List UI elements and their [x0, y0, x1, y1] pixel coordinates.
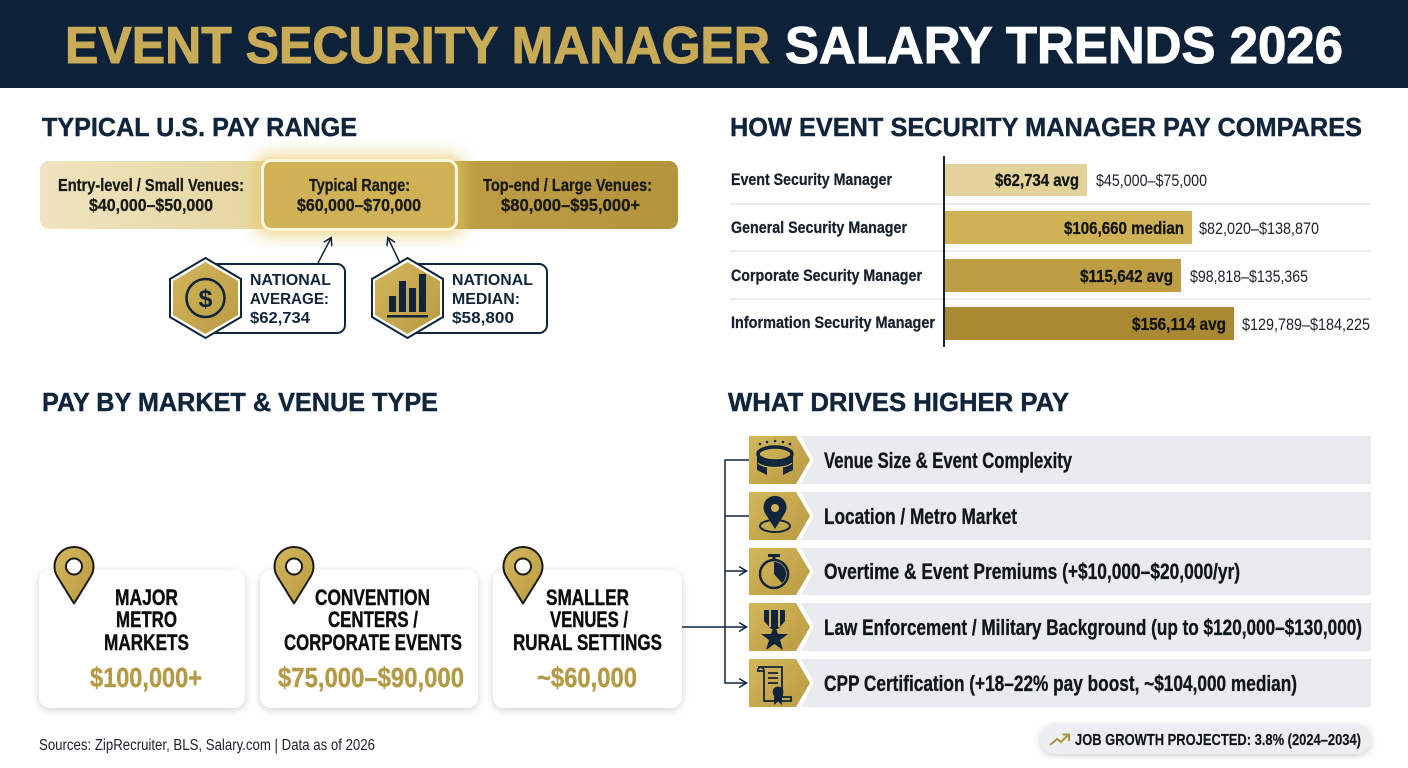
icon: certificate	[758, 667, 791, 703]
panel: pay range bar: Typical Range:	[309, 175, 410, 195]
heading: typical pay range: TYPICAL U.S. PAY RANGE	[42, 112, 357, 142]
row: general security manager	[731, 211, 1319, 244]
callout: national median	[372, 258, 547, 338]
panel: pay range bar: Entry-level / Small Venues:	[58, 175, 244, 195]
card: convention centers	[260, 547, 478, 708]
callout: national average: $62,734	[250, 310, 310, 327]
row: corporate security manager	[731, 259, 1308, 292]
callout: national average: AVERAGE:	[250, 291, 329, 308]
row: information security manager: $156,114 avg	[1132, 314, 1226, 334]
card: smaller venues: RURAL SETTINGS	[513, 630, 662, 655]
card: major metro markets	[39, 547, 245, 708]
card: major metro markets: MAJOR	[115, 585, 178, 610]
callout: national median: MEDIAN:	[452, 291, 520, 308]
arrow: average to typical range	[318, 238, 331, 263]
panel: pay range bar: Top-end / Large Venues:	[483, 175, 652, 195]
row: general security manager: $82,020–$138,870	[1199, 220, 1319, 238]
heading: market and venue: PAY BY MARKET & VENUE TYPE	[42, 387, 438, 417]
row: corporate security manager: $98,818–$135,365	[1190, 268, 1308, 286]
card: smaller venues: SMALLER	[546, 585, 629, 610]
icon: map pin	[760, 496, 790, 532]
row: information security manager: Information Security Manager	[731, 313, 935, 332]
driver: location	[749, 492, 1371, 540]
driver: overtime	[749, 548, 1371, 595]
row: information security manager: $129,789–$184,225	[1242, 316, 1370, 334]
callout: national average	[170, 258, 345, 338]
card: major metro markets: $100,000+	[90, 662, 202, 693]
panel: pay range bar: $80,000–$95,000+	[501, 195, 640, 215]
card: smaller venues: VENUES /	[550, 607, 628, 632]
arrow: median to typical range	[388, 238, 400, 263]
panel: pay range bar: $60,000–$70,000	[297, 195, 421, 215]
row: general security manager: General Security Manager	[731, 218, 907, 237]
row: information security manager	[731, 307, 1370, 340]
card: convention centers: CORPORATE EVENTS	[284, 630, 462, 655]
card: smaller venues	[493, 547, 682, 708]
driver: location: Location / Metro Market	[824, 504, 1017, 529]
title banner	[0, 0, 1408, 88]
source note: Sources: ZipRecruiter, BLS, Salary.com | Data as of 2026	[39, 737, 375, 754]
connector arrows	[682, 460, 749, 683]
heading: what drives higher pay: WHAT DRIVES HIGHER PAY	[728, 387, 1069, 417]
title banner: EVENT SECURITY MANAGER	[65, 17, 770, 75]
card: major metro markets: MARKETS	[104, 630, 189, 655]
callout: national average: NATIONAL	[250, 272, 331, 289]
card: smaller venues: ~$60,000	[537, 662, 637, 693]
icon: growth arrow	[1050, 734, 1069, 745]
icon: stopwatch	[760, 554, 788, 588]
card: convention centers: CONVENTION	[315, 585, 430, 610]
row: corporate security manager: $115,642 avg	[1080, 266, 1173, 286]
row: event security manager: $62,734 avg	[995, 170, 1079, 190]
callout: national median: $58,800	[452, 310, 514, 327]
heading: pay comparison: HOW EVENT SECURITY MANAGER PAY COMPARES	[730, 112, 1362, 142]
driver: venue size: Venue Size & Event Complexity	[824, 448, 1072, 473]
icon: medal	[761, 610, 788, 650]
driver: military background	[749, 603, 1371, 651]
card: major metro markets: METRO	[116, 607, 177, 632]
row: corporate security manager: Corporate Security Manager	[731, 266, 922, 285]
row: event security manager: $45,000–$75,000	[1096, 172, 1207, 190]
row: general security manager: $106,660 median	[1064, 218, 1184, 238]
job growth pill	[1040, 724, 1371, 754]
icon: stadium	[757, 440, 793, 475]
row: event security manager: Event Security Manager	[731, 170, 892, 189]
card: convention centers: CENTERS /	[328, 607, 418, 632]
callout: national median: NATIONAL	[452, 272, 533, 289]
job growth pill: JOB GROWTH PROJECTED: 3.8% (2024–2034)	[1075, 732, 1361, 749]
title banner: SALARY TRENDS 2026	[785, 17, 1343, 75]
driver: cpp certification	[749, 659, 1371, 707]
bar chart: pay comparison	[730, 156, 1370, 347]
row: event security manager	[731, 164, 1207, 196]
panel: pay range bar: $40,000–$50,000	[89, 195, 213, 215]
card: convention centers: $75,000–$90,000	[278, 662, 464, 693]
driver: venue size	[749, 436, 1371, 484]
panel: pay range bar	[40, 155, 678, 235]
driver: overtime: Overtime & Event Premiums (+$10,000–$20,000/yr)	[824, 559, 1240, 584]
callout: national average: $	[199, 285, 213, 313]
